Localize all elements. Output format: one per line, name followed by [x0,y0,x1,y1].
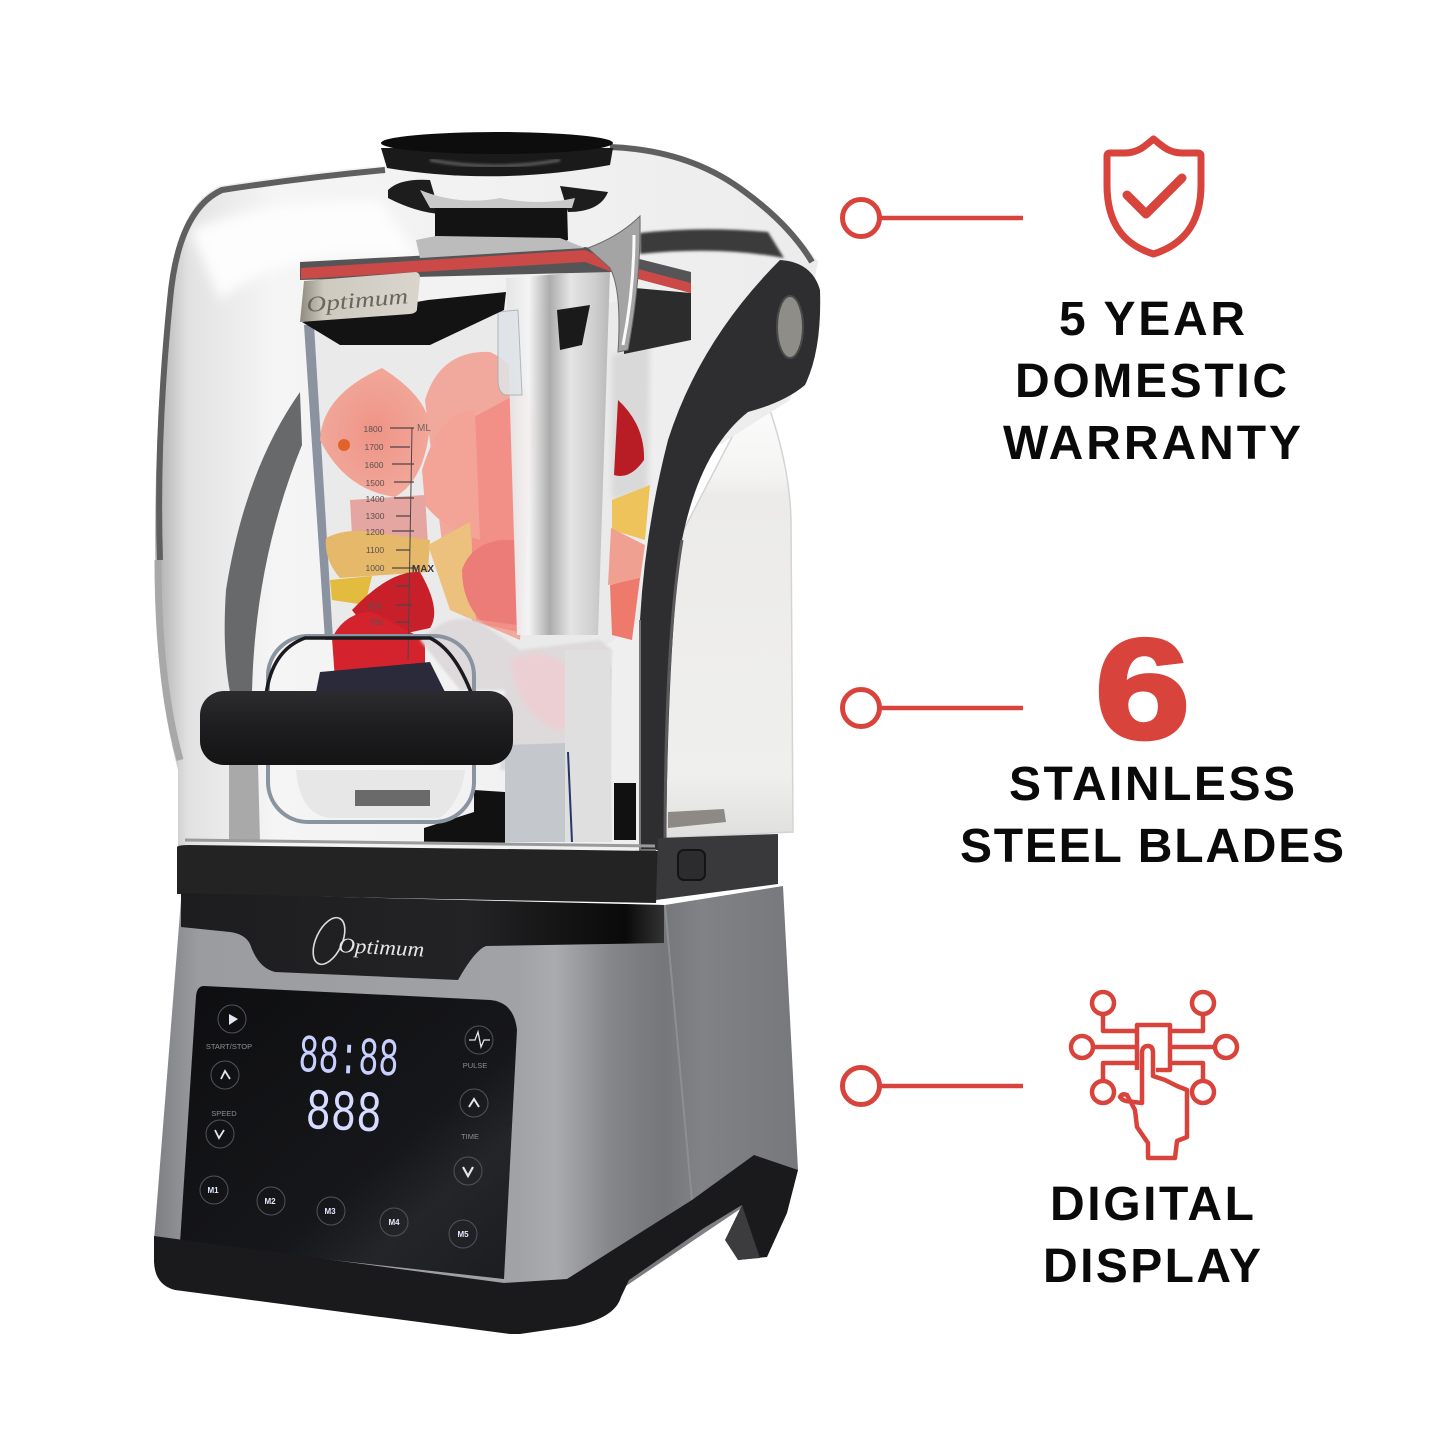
fruit group [316,352,650,692]
text: digital display: DIGITAL [1050,1178,1254,1231]
ice highlight pink [510,653,582,730]
scale numbers: MAX [412,564,434,575]
label pulse: PULSE [463,1061,487,1070]
jar base black left [424,790,505,843]
digit display top: 88:88 [297,1027,400,1093]
logo text: Optimum [338,933,425,961]
button time down [454,1157,482,1185]
label start/stop: START/STOP [206,1042,252,1051]
button speed up [211,1061,239,1089]
label speed: SPEED [211,1109,237,1118]
measurement scale [364,423,434,660]
yellow fruit right [612,485,650,540]
rear base plate [668,809,726,828]
red plum right [614,400,644,476]
lid right dark block [624,287,691,354]
script logo [307,913,425,969]
left inner arch [225,392,302,692]
button speed down [206,1120,234,1148]
scale spine [408,428,412,660]
callout line: blades [842,690,1023,726]
panel glass [180,986,517,1279]
droplets glass right [612,345,650,500]
scale numbers: 1100 [366,545,384,555]
side button [678,850,705,880]
lid top [381,132,613,154]
lid red stripe [301,250,691,293]
lid body [381,148,613,176]
text: 5 year domestic warranty: DOMESTIC [1015,355,1287,408]
button pulse [465,1026,493,1054]
shell left edge shadow [158,560,180,760]
memory buttons: M1 [207,1186,219,1195]
text: 5 year domestic warranty: 5 YEAR [1059,293,1245,346]
glass collar [420,190,575,208]
blade jar lid collar [300,247,691,293]
badge metal [300,272,420,322]
shell base collar side [656,834,778,900]
jar interior bottom [296,770,465,818]
ice highlight grey [590,665,610,770]
memory buttons [200,1176,477,1248]
strawberry lower [332,612,425,680]
peach centre [422,410,480,540]
scale numbers: ML [417,423,431,434]
left arch lower pillar [229,765,260,842]
grip ring top dark [266,638,472,695]
memory buttons: M2 [264,1197,276,1206]
pink fruit right [608,528,645,585]
clear lid pillar [588,216,640,352]
jar neck [435,204,568,246]
large peach slice [320,368,430,497]
scale ticks [390,428,416,622]
scale numbers: 1300 [366,511,385,521]
hinge knob [777,296,803,358]
badge plate [300,272,420,322]
digit display bottom: 888 [304,1081,383,1149]
neck ring [416,236,585,258]
black lid [381,132,613,176]
shell top edge [159,147,812,560]
memory buttons: M4 [388,1218,400,1227]
strawberry tall [462,540,518,625]
strawberry upper [352,572,434,640]
label time: TIME [461,1132,479,1141]
jar tube bead [498,310,522,395]
scale numbers: 700 [369,617,383,627]
scale numbers: 1400 [366,494,385,504]
scale numbers: 1700 [365,442,384,452]
peach wedge [428,522,476,620]
pineapple slice [326,531,430,578]
berry dark [316,662,445,692]
text: 5 year domestic warranty: WARRANTY [1003,417,1301,470]
base black collar [181,893,664,980]
text: digital display: DISPLAY [1043,1240,1261,1293]
dark reflection in shell top [640,229,784,258]
product photo: blender [154,132,820,1334]
scale numbers [364,423,434,627]
jar tube dark insert [557,305,590,350]
lid underside shadow left [388,180,440,214]
control panel [180,986,517,1279]
pink fruit rear [425,352,535,640]
grip handle [200,691,513,765]
black base foot [154,1155,798,1334]
glass trim at collar [185,840,655,846]
shell base collar front [177,845,660,903]
strawberry flesh panel [472,395,518,632]
side edge shade [665,905,692,1200]
scale numbers: 1800 [364,424,383,434]
button time up [460,1089,488,1117]
callout line: display [842,1068,1023,1104]
peach seed dot [338,439,350,451]
text: stainless steel blades: STEEL BLADES [960,820,1344,873]
glass tube lower [565,650,612,842]
pink chunk [350,495,428,545]
pillar highlight [623,235,634,345]
scale numbers: 1600 [365,460,384,470]
ice and splash [420,619,612,770]
jar left wall [304,325,333,640]
pineapple slice lower [330,576,372,605]
jar window dark strip [355,790,430,806]
rear glass enclosure [660,410,793,838]
scale numbers: 1500 [366,478,385,488]
text: stainless steel blades [960,758,1344,873]
text: 5 year domestic warranty [1003,293,1301,470]
big number 6: 6 [1095,610,1190,769]
text: stainless steel blades: STAINLESS [1009,758,1295,811]
callout line: warranty [842,200,1023,236]
memory buttons: M3 [324,1207,336,1216]
shell right dark arch [640,260,820,850]
shell front corner edge [640,620,656,850]
motor base silver body [154,886,798,1290]
lid underside dark [302,292,506,345]
arch lighter inner strip [665,540,682,850]
button start/stop [218,1005,246,1033]
badge logo text: Optimum [305,283,409,317]
scale numbers: 1200 [366,527,385,537]
memory buttons: M5 [457,1230,469,1239]
shell soft reflections [190,200,420,300]
jar glass [304,300,648,650]
text: digital display [1043,1178,1261,1293]
logo O ellipse [307,913,351,969]
jar blade housing [505,743,565,842]
foot highlight edge [725,1205,760,1260]
lid underside shadow right [560,186,608,212]
glass blue edge [568,752,572,842]
jar spout tube [506,270,610,635]
lid sheen [430,160,560,166]
icon: digital touch [1071,992,1237,1158]
clear sound shell [155,146,818,850]
icon: shield check [1107,139,1201,254]
jar base black right [614,783,636,840]
glass grip ring [268,636,474,822]
scale numbers: 800 [368,601,382,611]
scale numbers: 1000 [366,563,385,573]
strawberry right [610,578,640,640]
